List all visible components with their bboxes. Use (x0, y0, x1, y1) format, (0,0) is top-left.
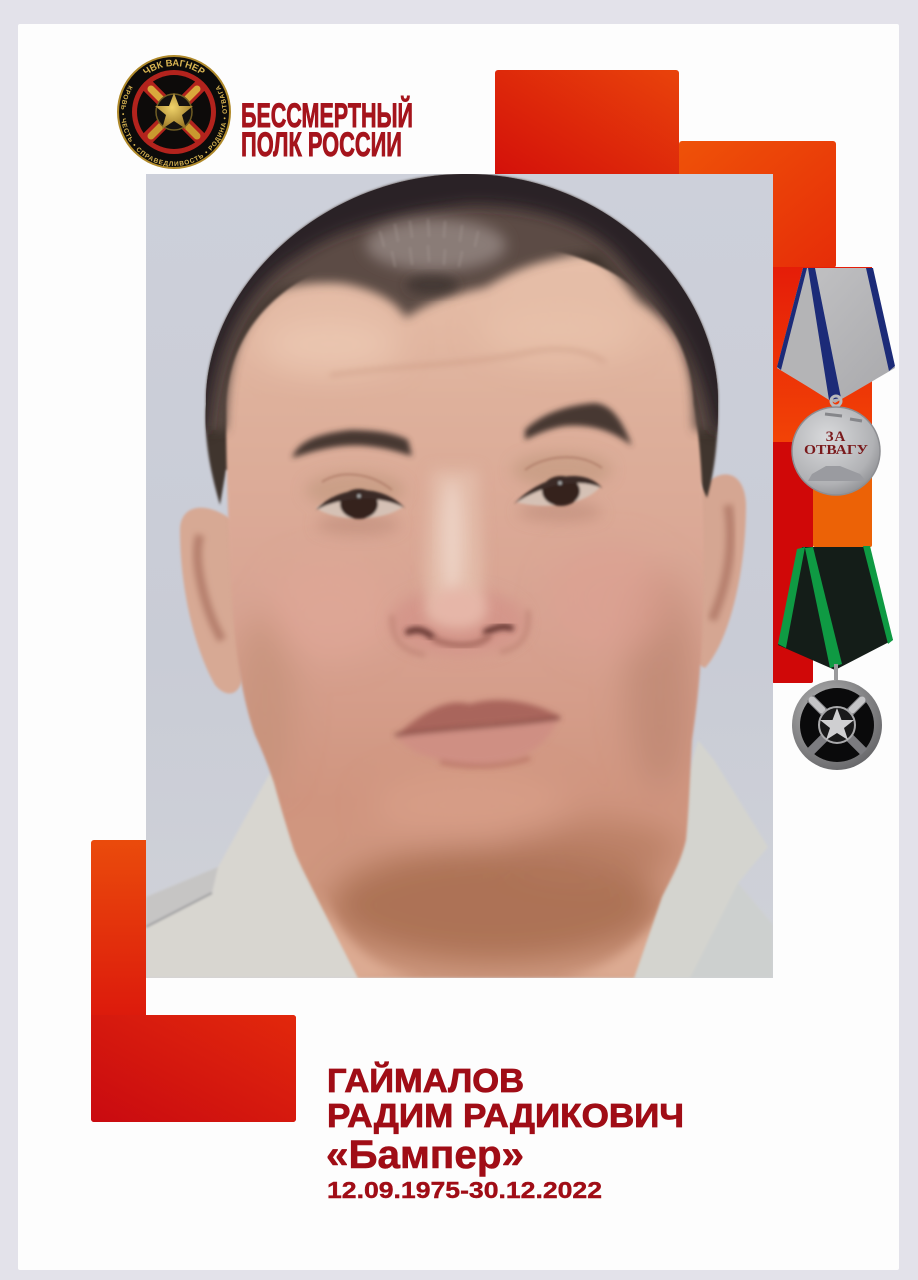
chin and jaw shading (235, 300, 695, 963)
medal: For Courage: ЗА (826, 429, 846, 445)
ears (180, 474, 746, 693)
given name and patronymic: РАДИМ РАДИКОВИЧ (327, 1097, 684, 1134)
heading: Immortal Regiment (241, 96, 413, 164)
decorative red blocks: top right (495, 70, 872, 683)
surname: ГАЙМАЛОВ (327, 1061, 524, 1099)
logo ring text: КРОВЬ • ЧЕСТЬ • СПРАВЕДЛИВОСТЬ • РОДИНА • ОТВАГА (121, 85, 227, 167)
medal: For Courage: ОТВАГУ (804, 443, 868, 458)
lower neck highlight (324, 905, 652, 978)
forehead wrinkle (330, 349, 605, 375)
logo crossed swords (146, 84, 202, 140)
medal: PMC black and green (778, 546, 893, 770)
medal disc (792, 407, 880, 495)
decorative red block: bottom left L shape (91, 840, 296, 1122)
heading: Immortal Regiment: ПОЛК РОССИИ (241, 126, 402, 164)
dates: 12.09.1975-30.12.2022 (327, 1177, 602, 1203)
call sign: «Бампер» (326, 1133, 524, 1177)
logo: PMC emblem (117, 55, 231, 169)
logo star (155, 93, 193, 129)
eye sockets (305, 452, 612, 535)
ribbon (777, 268, 895, 403)
eyebrows (292, 403, 632, 458)
hair back silhouette (206, 174, 718, 505)
face and neck skin (224, 252, 704, 978)
name block (326, 1061, 684, 1203)
medal star (820, 708, 854, 740)
heading: Immortal Regiment: БЕССМЕРТНЫЙ (241, 96, 413, 135)
eyes (316, 457, 602, 519)
stubble (379, 220, 462, 266)
medal disc (792, 680, 882, 770)
logo ring text: ЧВК ВАГНЕР (142, 59, 205, 73)
portrait photograph (146, 160, 773, 982)
medal: For Courage (777, 268, 895, 495)
shirt (146, 740, 773, 978)
hair over forehead (190, 160, 730, 430)
ribbon (778, 547, 893, 670)
mouth (395, 700, 561, 766)
nose (390, 470, 528, 656)
